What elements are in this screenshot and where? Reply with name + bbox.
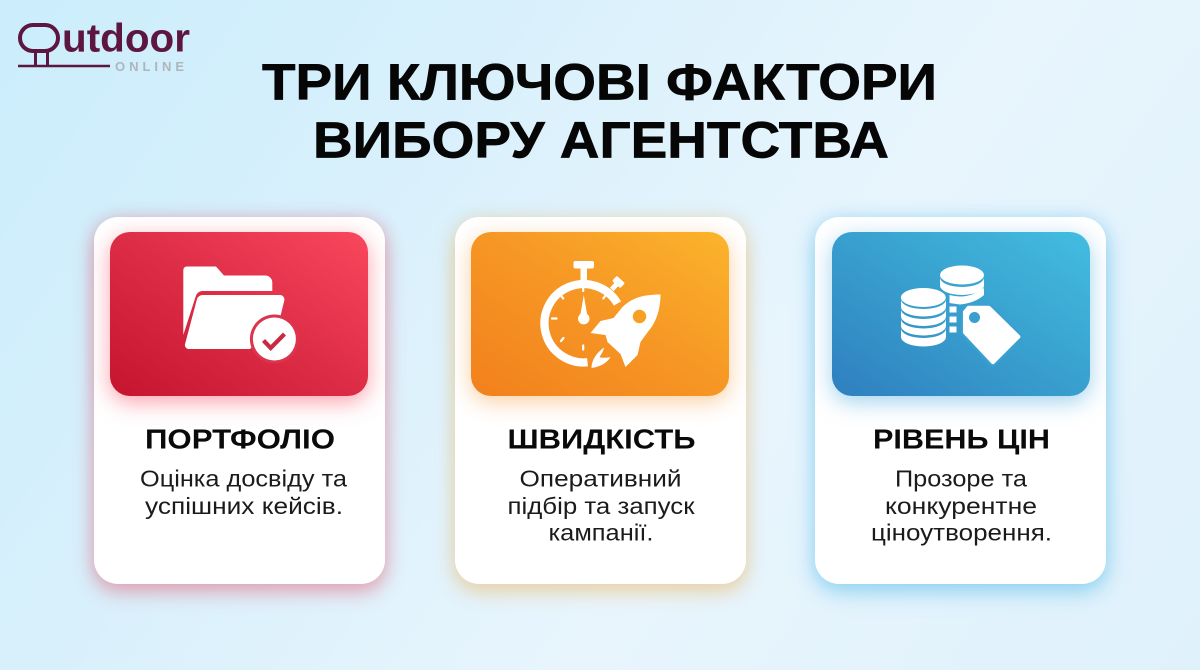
speed text: Оперативний (519, 466, 681, 492)
orange icon tile (470, 232, 728, 396)
speed text: кампанії. (548, 520, 653, 546)
panel: price level (815, 217, 1106, 584)
icon: coins and price tag (900, 266, 1020, 364)
speed text: підбір та запуск (507, 493, 695, 519)
price level text: ціноутворення. (871, 520, 1052, 546)
logo: Outdoor Online (18, 16, 190, 74)
price level text: конкурентне (885, 493, 1037, 519)
speed text: ШВИДКІСТЬ (507, 424, 695, 454)
logo: Outdoor Online: utdoor (62, 16, 190, 60)
title: ВИБОРУ АГЕНТСТВА (313, 112, 889, 168)
icon: stopwatch and rocket (540, 261, 660, 368)
speed text (507, 424, 695, 546)
icon: folder with check mark (183, 266, 296, 364)
portfolio text (140, 424, 348, 519)
portfolio text: успішних кейсів. (145, 493, 343, 519)
title (262, 54, 937, 168)
blue icon tile (832, 232, 1090, 396)
price level text (871, 424, 1052, 546)
portfolio text: Оцінка досвіду та (140, 466, 348, 492)
title: ТРИ КЛЮЧОВІ ФАКТОРИ (262, 54, 937, 110)
panel: speed (454, 217, 746, 584)
panel: portfolio (94, 217, 385, 584)
logo: Outdoor Online: ONLINE (115, 59, 184, 74)
red icon tile (110, 232, 368, 396)
price level text: РІВЕНЬ ЦІН (873, 424, 1050, 454)
portfolio text: ПОРТФОЛІО (145, 424, 335, 454)
price level text: Прозоре та (895, 466, 1028, 492)
